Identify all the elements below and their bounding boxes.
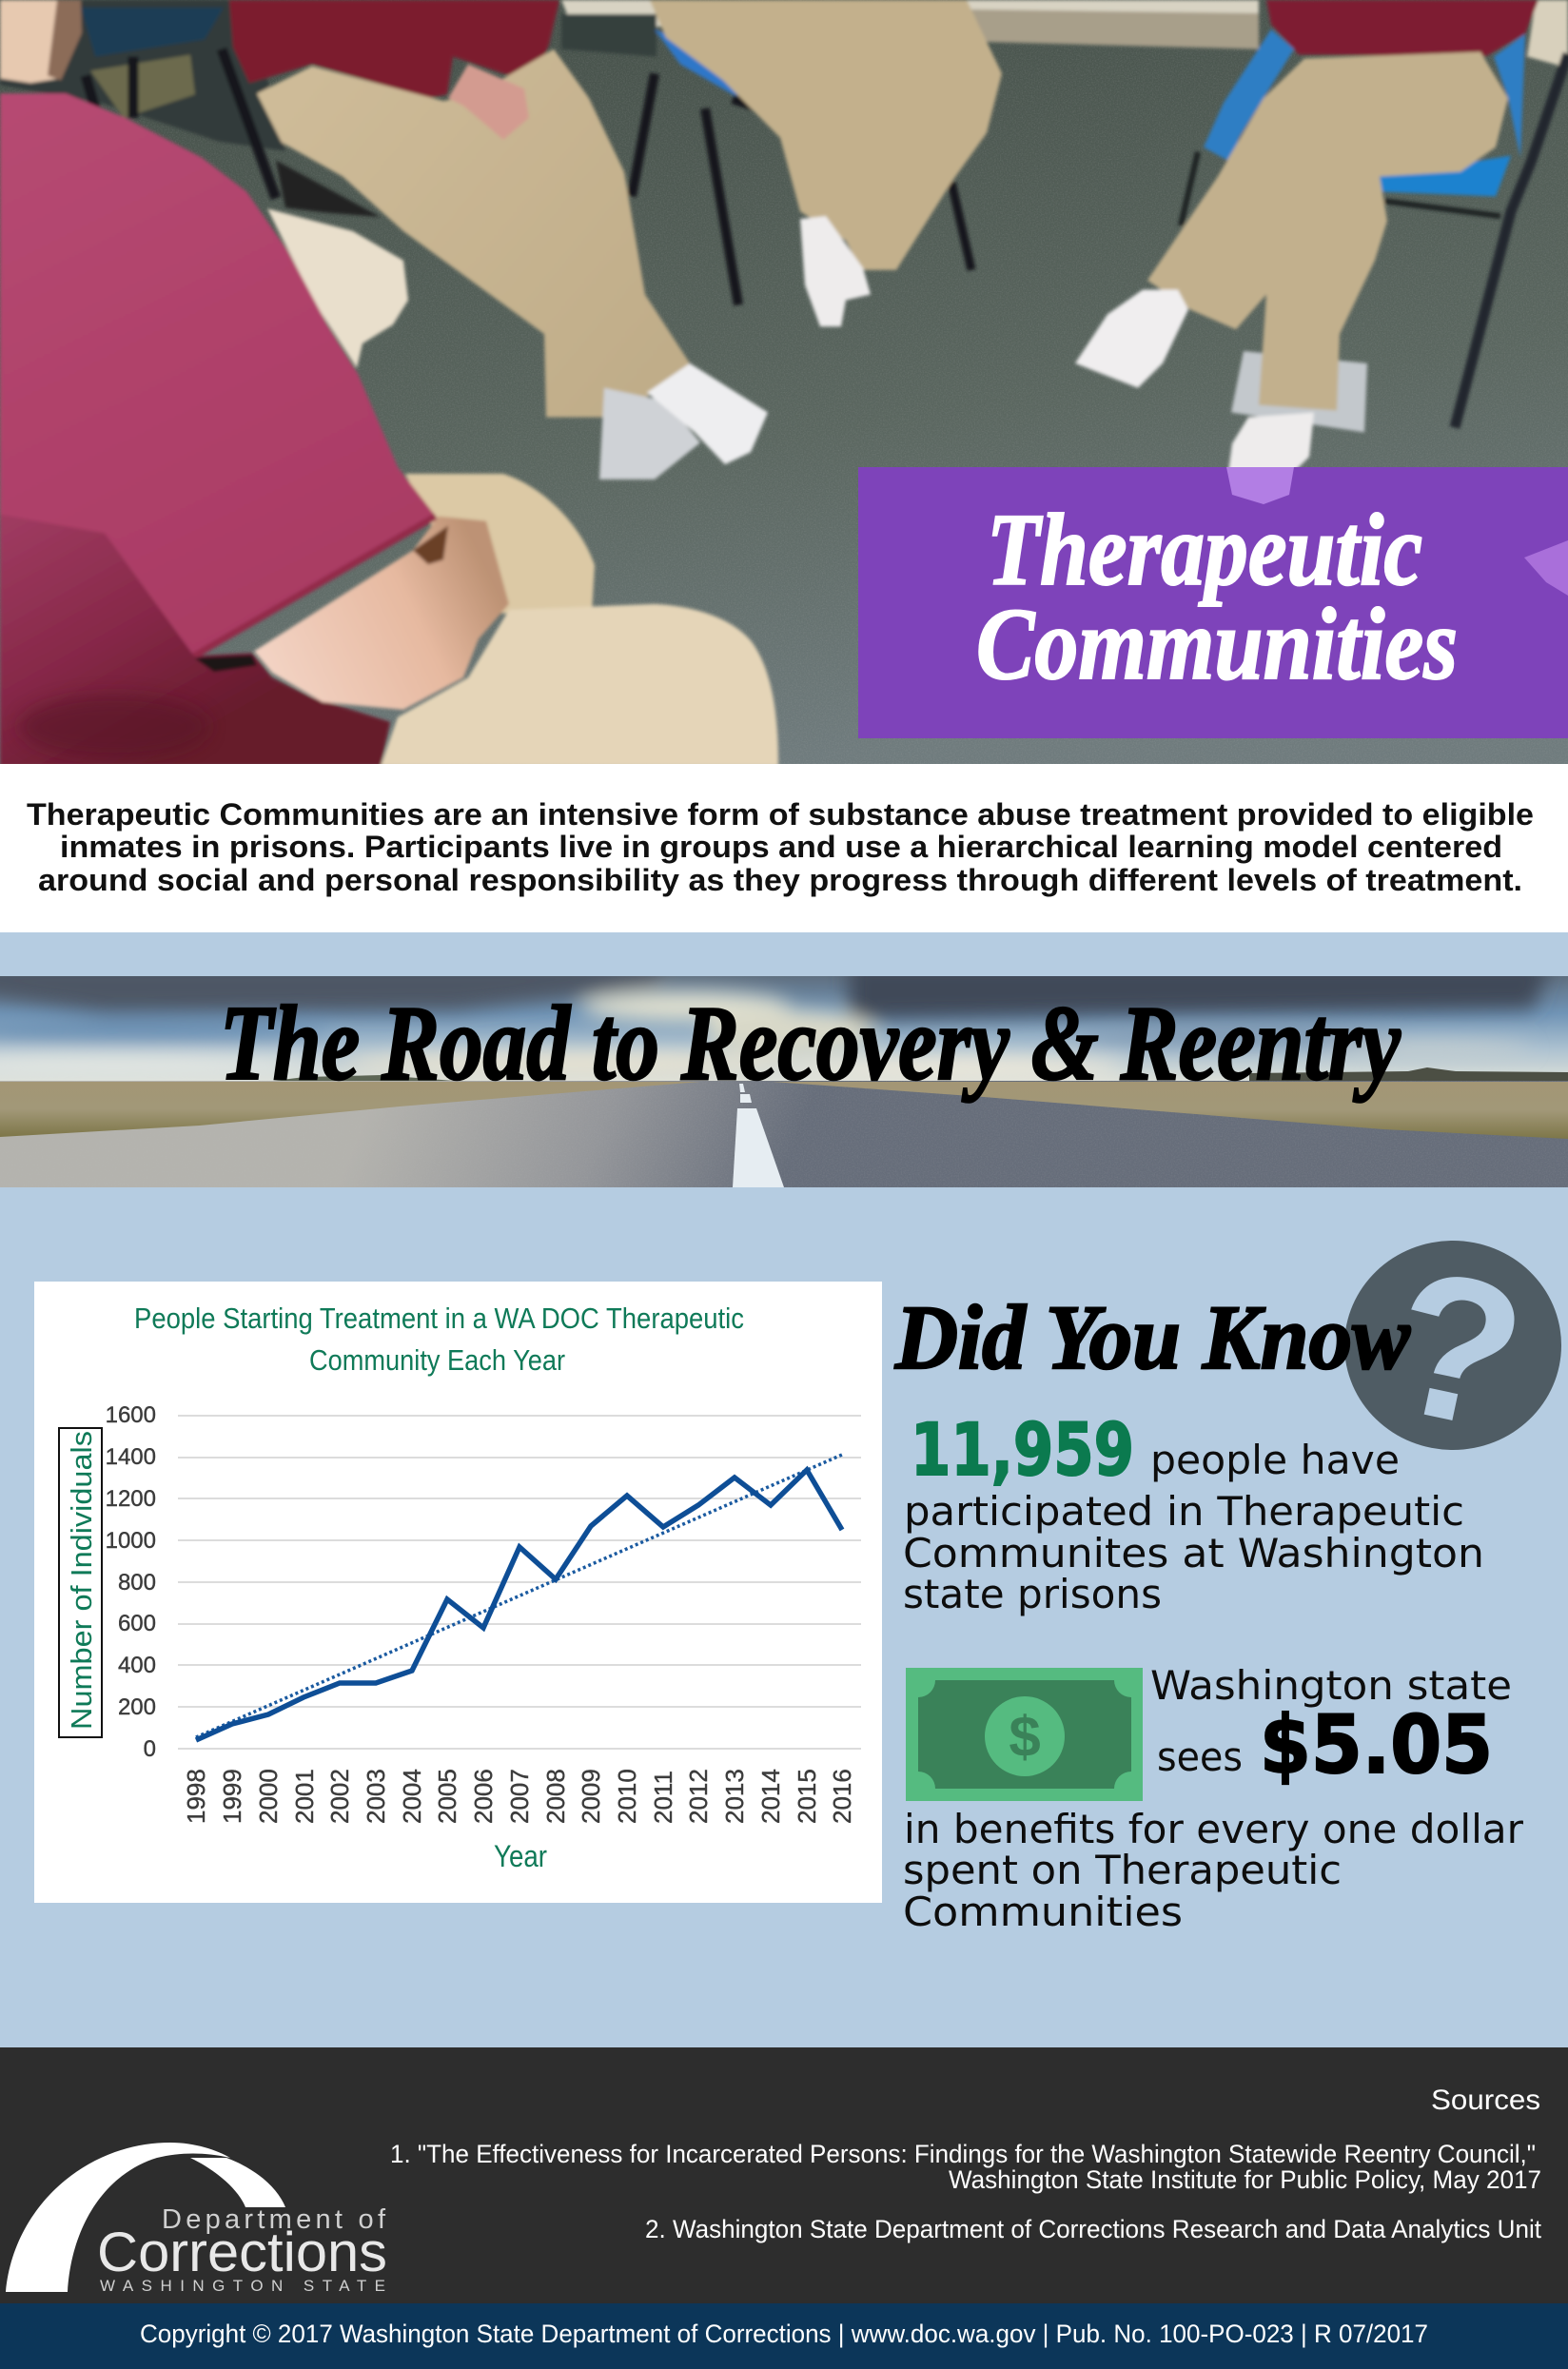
panel: copyright bar: Copyright © 2017 Washington State Department of Corrections | www.doc.wa.gov | Pub. No. 100-PO-023 | R 07/2017 (140, 2320, 1428, 2348)
heading: Did You Know: Did You Know (894, 1286, 1411, 1388)
x axis labels: 1999 (218, 1769, 246, 1824)
panel: footer sources (0, 2047, 1568, 2303)
x axis title: Year (494, 1839, 547, 1873)
y axis labels: 1000 (106, 1528, 156, 1554)
stat: $5.05 benefits: in benefits for every one dollar (904, 1806, 1524, 1852)
y axis labels: 1400 (106, 1444, 156, 1470)
stat: $5.05 benefits: Communities (903, 1889, 1183, 1935)
y axis labels: 0 (144, 1736, 156, 1762)
y axis labels: 1600 (106, 1402, 156, 1428)
sources list: Sources (1431, 2085, 1540, 2116)
intro text block: inmates in prisons. Participants live in groups and use a hierarchical learning model centered (60, 830, 1502, 864)
chart title: People Starting Treatment in a WA DOC Therapeutic (134, 1302, 744, 1335)
logo: Department of Corrections: Corrections (97, 2222, 387, 2283)
x axis labels: 2004 (398, 1769, 426, 1824)
x axis labels: 2006 (469, 1769, 498, 1824)
x axis labels: 2008 (541, 1769, 570, 1824)
x axis labels: 2003 (362, 1769, 390, 1824)
panel: copyright bar (0, 2303, 1568, 2369)
logo: Department of Corrections: Department of (162, 2204, 386, 2235)
y axis labels: 1200 (106, 1486, 156, 1512)
icon: dollar bill: $ (1009, 1705, 1041, 1769)
photo: inmates seated in a circle (0, 0, 1568, 767)
banner: road photo (0, 961, 1568, 1187)
stat: $5.05 benefits: Washington state (1150, 1662, 1512, 1709)
x axis labels (182, 1769, 856, 1824)
stat: 11,959 participants: state prisons (903, 1571, 1162, 1617)
x axis labels: 2002 (325, 1769, 354, 1824)
stat: 11,959 participants (903, 1407, 1484, 1617)
stat: 11,959 participants: Communites at Washington (903, 1530, 1484, 1576)
title: Therapeutic Communities: Therapeutic (987, 494, 1422, 607)
stat: $5.05 benefits (903, 1662, 1524, 1935)
sources list: Washington State Institute for Public Policy, May 2017 (949, 2165, 1541, 2194)
title: Therapeutic Communities (976, 494, 1458, 701)
y axis labels: 800 (118, 1570, 156, 1596)
x axis labels: 2010 (613, 1769, 641, 1824)
sources list: 1. "The Effectiveness for Incarcerated Persons: Findings for the Washington Statewide Reentry Council," (390, 2140, 1536, 2168)
sources list (390, 2085, 1541, 2243)
x axis labels: 1998 (182, 1769, 210, 1824)
x axis labels: 2015 (793, 1769, 821, 1824)
y axis labels: 600 (118, 1611, 156, 1636)
title: Therapeutic Communities: Communities (976, 588, 1458, 701)
chart title: Community Each Year (309, 1343, 565, 1377)
stat: $5.05 benefits: sees (1157, 1733, 1243, 1780)
data line (196, 1470, 842, 1740)
icon: dollar bill (906, 1668, 1143, 1801)
stat: 11,959 participants: 11,959 (911, 1407, 1134, 1492)
y axis labels: 400 (118, 1653, 156, 1678)
intro text block (27, 797, 1534, 897)
y axis labels: 200 (118, 1694, 156, 1720)
white intro band (0, 764, 1568, 932)
panel: purple title box (858, 467, 1568, 738)
stat: $5.05 benefits: spent on Therapeutic (903, 1847, 1342, 1893)
trend line (196, 1455, 842, 1737)
sources list: 2. Washington State Department of Corrections Research and Data Analytics Unit (645, 2215, 1541, 2243)
intro text block: around social and personal responsibility as they progress through different levels of treatment. (38, 863, 1522, 897)
icon: question mark circle: ? (1372, 1224, 1542, 1474)
x axis labels: 2005 (433, 1769, 461, 1824)
panel: line chart (34, 1282, 882, 1903)
logo: Department of Corrections: WASHINGTON STATE (100, 2277, 385, 2295)
stat: $5.05 benefits: $5.05 (1260, 1698, 1493, 1791)
x axis labels: 2011 (649, 1771, 677, 1824)
x axis labels: 2013 (720, 1769, 749, 1824)
stat: 11,959 participants: participated in Therapeutic (904, 1488, 1464, 1535)
x axis labels: 2001 (290, 1769, 319, 1824)
x axis labels: 2014 (756, 1769, 785, 1824)
y axis title: Number of Individuals (65, 1431, 98, 1730)
x axis labels: 2016 (828, 1769, 856, 1824)
stat: 11,959 participants: people have (1150, 1437, 1400, 1483)
chart title (134, 1302, 744, 1377)
intro text block: Therapeutic Communities are an intensive form of substance abuse treatment provided to eligible (27, 797, 1534, 832)
x axis labels: 2009 (577, 1769, 605, 1824)
x axis labels: 2012 (684, 1769, 713, 1824)
logo: Department of Corrections (6, 2143, 387, 2295)
x axis labels: 2007 (505, 1769, 534, 1824)
x axis labels: 2000 (254, 1769, 283, 1824)
y axis labels (106, 1402, 156, 1762)
chart gridlines (178, 1416, 861, 1749)
